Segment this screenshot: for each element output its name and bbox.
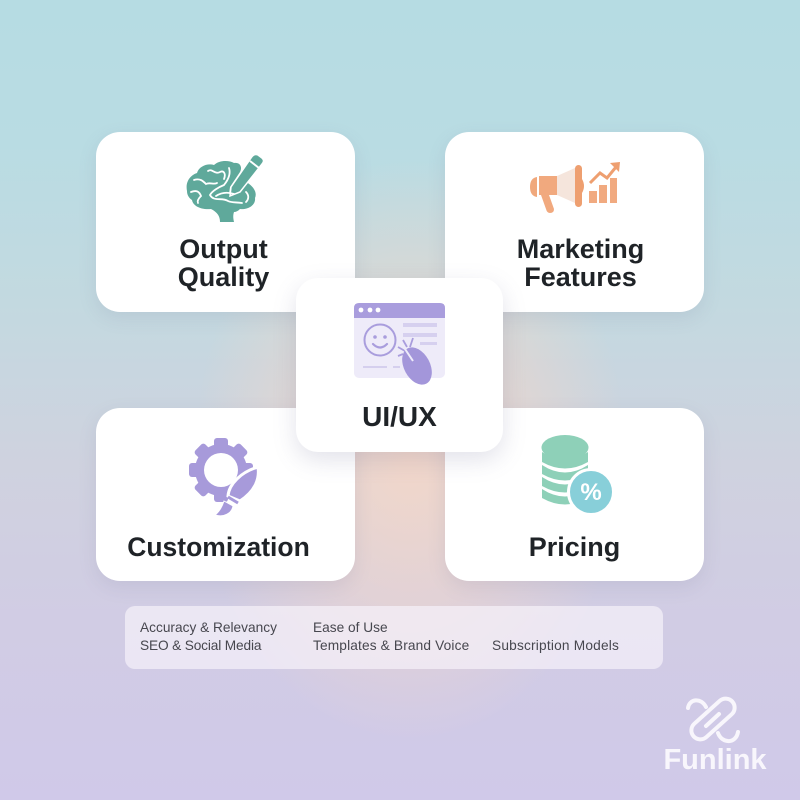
legend panel	[125, 606, 663, 669]
panel: output quality	[96, 132, 355, 312]
icon: megaphone with growth chart	[530, 162, 620, 213]
icon: browser window with smiley and mouse	[354, 303, 445, 385]
panel: pricing	[445, 408, 704, 581]
panel: customization	[96, 408, 355, 581]
legend text column 1: SEO & Social Media	[140, 638, 261, 653]
legend text column 2	[313, 620, 469, 653]
panel: marketing features	[445, 132, 704, 312]
legend text column 1	[140, 620, 277, 653]
heading: output quality	[178, 234, 270, 292]
panel: ui/ux	[296, 278, 503, 452]
icon: brain with pencil	[186, 155, 263, 222]
legend text column 2: Ease of Use	[313, 620, 388, 635]
legend text column 2: Templates & Brand Voice	[313, 638, 469, 653]
wordmark: Funlink	[663, 744, 767, 776]
icon: gear with paintbrush	[189, 438, 257, 516]
heading: output quality: Output	[179, 234, 268, 264]
heading: pricing: Pricing	[529, 532, 620, 562]
icon: chain link	[686, 696, 740, 744]
heading: ui/ux: UI/UX	[362, 401, 437, 432]
percent sign: %	[580, 479, 602, 506]
logo: funlink	[663, 696, 767, 776]
heading: marketing features	[517, 234, 644, 292]
heading: output quality: Quality	[178, 262, 269, 292]
heading: marketing features: Marketing	[517, 234, 644, 264]
icon: coin stack with percent badge	[542, 435, 612, 513]
legend text column 1: Accuracy & Relevancy	[140, 620, 277, 635]
heading: marketing features: Features	[524, 262, 637, 292]
legend text column 3: Subscription Models	[492, 638, 619, 653]
heading: customization: Customization	[127, 532, 310, 562]
